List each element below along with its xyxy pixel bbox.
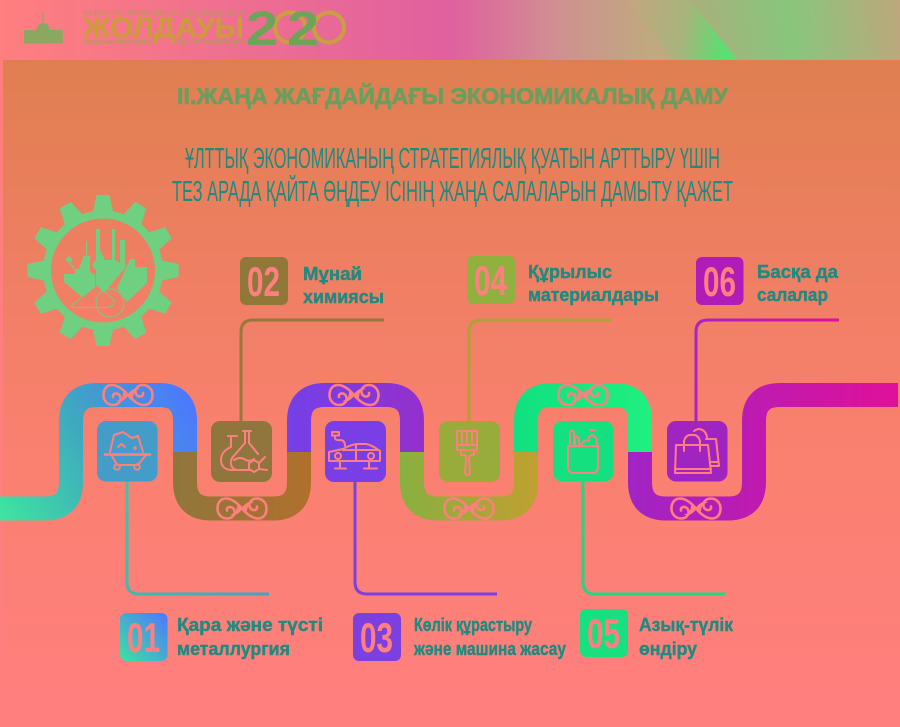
label 04: Құрылыс bbox=[528, 262, 612, 282]
logo: Zholdauy 2020: ЖОЛДАУЫ bbox=[82, 12, 244, 44]
logo: Zholdauy 2020 bbox=[82, 3, 344, 56]
icon tile: shopping bags bbox=[667, 421, 728, 482]
logo: Zholdauy 2020: 2 bbox=[287, 3, 319, 56]
icon tile: paint brush bbox=[439, 421, 500, 482]
label 06: Басқа да bbox=[757, 262, 839, 282]
label 05: Азық-түлік bbox=[639, 615, 734, 635]
label 02: химиясы bbox=[303, 287, 384, 307]
number badge 05: 05 bbox=[587, 610, 620, 657]
icon tile: car on lift bbox=[325, 421, 386, 482]
label 01: Қара және түсті bbox=[177, 615, 323, 635]
winding road bbox=[0, 395, 898, 508]
label 02: Мұнай bbox=[303, 264, 362, 284]
title: II.ЖАҢА ЖАҒДАЙДАҒЫ ЭКОНОМИКАЛЫҚ ДАМУ bbox=[177, 82, 729, 109]
ornament 5 bbox=[558, 385, 608, 405]
label 04: материалдары bbox=[528, 285, 659, 305]
number badge 03: 03 bbox=[360, 614, 393, 661]
number badge 02: 02 bbox=[247, 258, 280, 305]
logo: Zholdauy 2020: ПОСЛАНИЕ ПРЕЗИДЕНТА bbox=[84, 40, 152, 46]
ornament 6 bbox=[672, 498, 720, 518]
label 06: салалар bbox=[757, 285, 828, 305]
connector lines bbox=[127, 320, 839, 594]
logo: Zholdauy 2020: 2 bbox=[246, 3, 278, 56]
logo: Zholdauy 2020: РЕСПУБЛИКИ КАЗАХСТАН bbox=[178, 40, 245, 46]
icon tile: ore cart bbox=[97, 421, 158, 482]
header banner bbox=[0, 0, 900, 60]
number badge 01: 01 bbox=[127, 614, 160, 661]
ornament 1 bbox=[104, 385, 152, 405]
icon tile: chemistry flasks bbox=[211, 421, 272, 482]
label 06 bbox=[757, 262, 839, 305]
label 03 bbox=[413, 615, 566, 659]
label 03: Көлік құрастыру bbox=[414, 615, 532, 635]
number badge 06: 06 bbox=[703, 258, 736, 305]
label 01: металлургия bbox=[177, 639, 290, 659]
icon: gear with factory and flask bbox=[28, 195, 178, 346]
ornament 2 bbox=[218, 498, 266, 518]
subtitle bbox=[172, 143, 733, 208]
label 01 bbox=[177, 615, 323, 659]
icon: Akorda building bbox=[24, 12, 63, 44]
label 03: және машина жасау bbox=[413, 639, 566, 659]
label 04 bbox=[528, 262, 659, 305]
ornament 4 bbox=[444, 498, 494, 518]
logo: Zholdauy 2020: ҚАЗАҚСТАН РЕСПУБЛИКАСЫ ПРЕЗИДЕНТІНІҢ bbox=[84, 10, 243, 16]
number badge 04: 04 bbox=[474, 257, 507, 304]
label 02 bbox=[303, 264, 384, 307]
label 05: өндіру bbox=[639, 639, 697, 659]
ornament 3 bbox=[330, 385, 378, 405]
label 05 bbox=[639, 615, 734, 659]
icon tile: grocery bag bbox=[553, 421, 614, 482]
